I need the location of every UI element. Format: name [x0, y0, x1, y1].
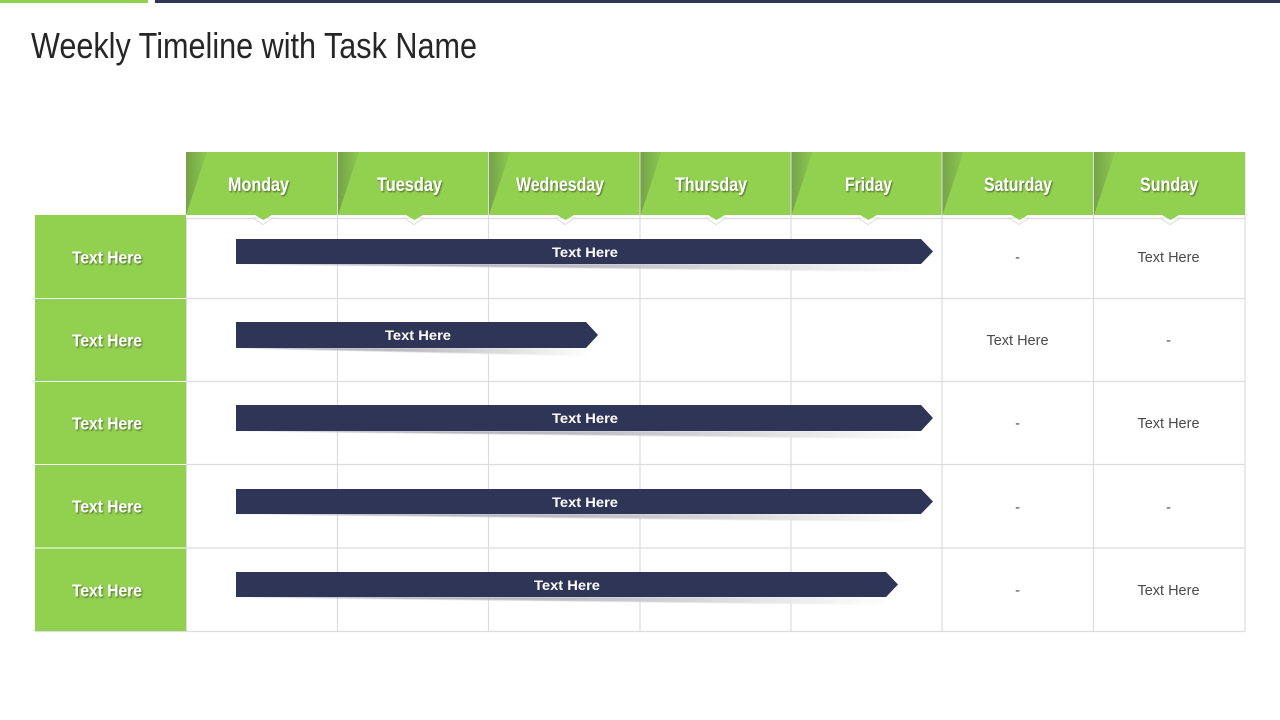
task bar 3: Text Here: [552, 410, 618, 426]
row 5 Sunday: Text Here: [1137, 583, 1200, 599]
row label 4: [35, 465, 186, 548]
header: Thursday: [640, 152, 790, 224]
header: Wednesday: [489, 152, 640, 224]
row 4 Sunday: -: [1166, 500, 1171, 516]
task bar 5: [236, 572, 898, 605]
row label 3: Text Here: [72, 414, 142, 434]
weekend cell texts: [986, 250, 1200, 599]
header: Wednesday: Wednesday: [516, 175, 604, 196]
header: Monday: Monday: [228, 175, 289, 196]
header: Sunday: [1094, 152, 1245, 224]
header: Tuesday: Tuesday: [377, 175, 442, 196]
header: Tuesday: [338, 152, 488, 224]
row 1 Saturday: -: [1015, 250, 1020, 266]
top accent bar: navy: [155, 0, 1280, 3]
header: Thursday: Thursday: [675, 175, 747, 196]
header row: days of the week: [186, 152, 1245, 224]
header: Monday: [186, 152, 337, 224]
row 4 Saturday: -: [1015, 500, 1020, 516]
task bar 4: [236, 489, 933, 522]
task bar 1: Text Here: [552, 244, 618, 260]
row 5 Saturday: -: [1015, 583, 1020, 599]
header: Sunday: Sunday: [1140, 175, 1198, 196]
header: Saturday: Saturday: [984, 175, 1052, 196]
row 2 Saturday: Text Here: [986, 333, 1049, 349]
row 3 Saturday: -: [1015, 416, 1020, 432]
row label 4: Text Here: [72, 496, 142, 516]
row label 5: [35, 548, 186, 631]
row label 2: [35, 299, 186, 381]
header: Friday: Friday: [845, 175, 892, 196]
task bar 5: Text Here: [534, 577, 600, 593]
title: Weekly Timeline with Task Name: [31, 25, 477, 66]
top accent bar: green: [0, 0, 148, 3]
header: Saturday: [942, 152, 1093, 224]
table grid: [35, 152, 1245, 632]
row label 2: Text Here: [72, 330, 142, 350]
task bar 2: Text Here: [385, 327, 451, 343]
row 2 Sunday: -: [1166, 333, 1171, 349]
row label 5: Text Here: [72, 580, 142, 600]
row label 1: [35, 215, 186, 298]
task bar 1: [236, 239, 933, 272]
task bar 3: [236, 405, 933, 439]
header: Friday: [792, 152, 942, 224]
row 1 Sunday: Text Here: [1137, 250, 1200, 266]
task bar 4: Text Here: [552, 494, 618, 510]
row labels column: [35, 215, 186, 631]
row label 3: [35, 382, 186, 464]
row 3 Sunday: Text Here: [1137, 416, 1200, 432]
task bar 2: [236, 322, 598, 356]
row label 1: Text Here: [72, 248, 142, 268]
